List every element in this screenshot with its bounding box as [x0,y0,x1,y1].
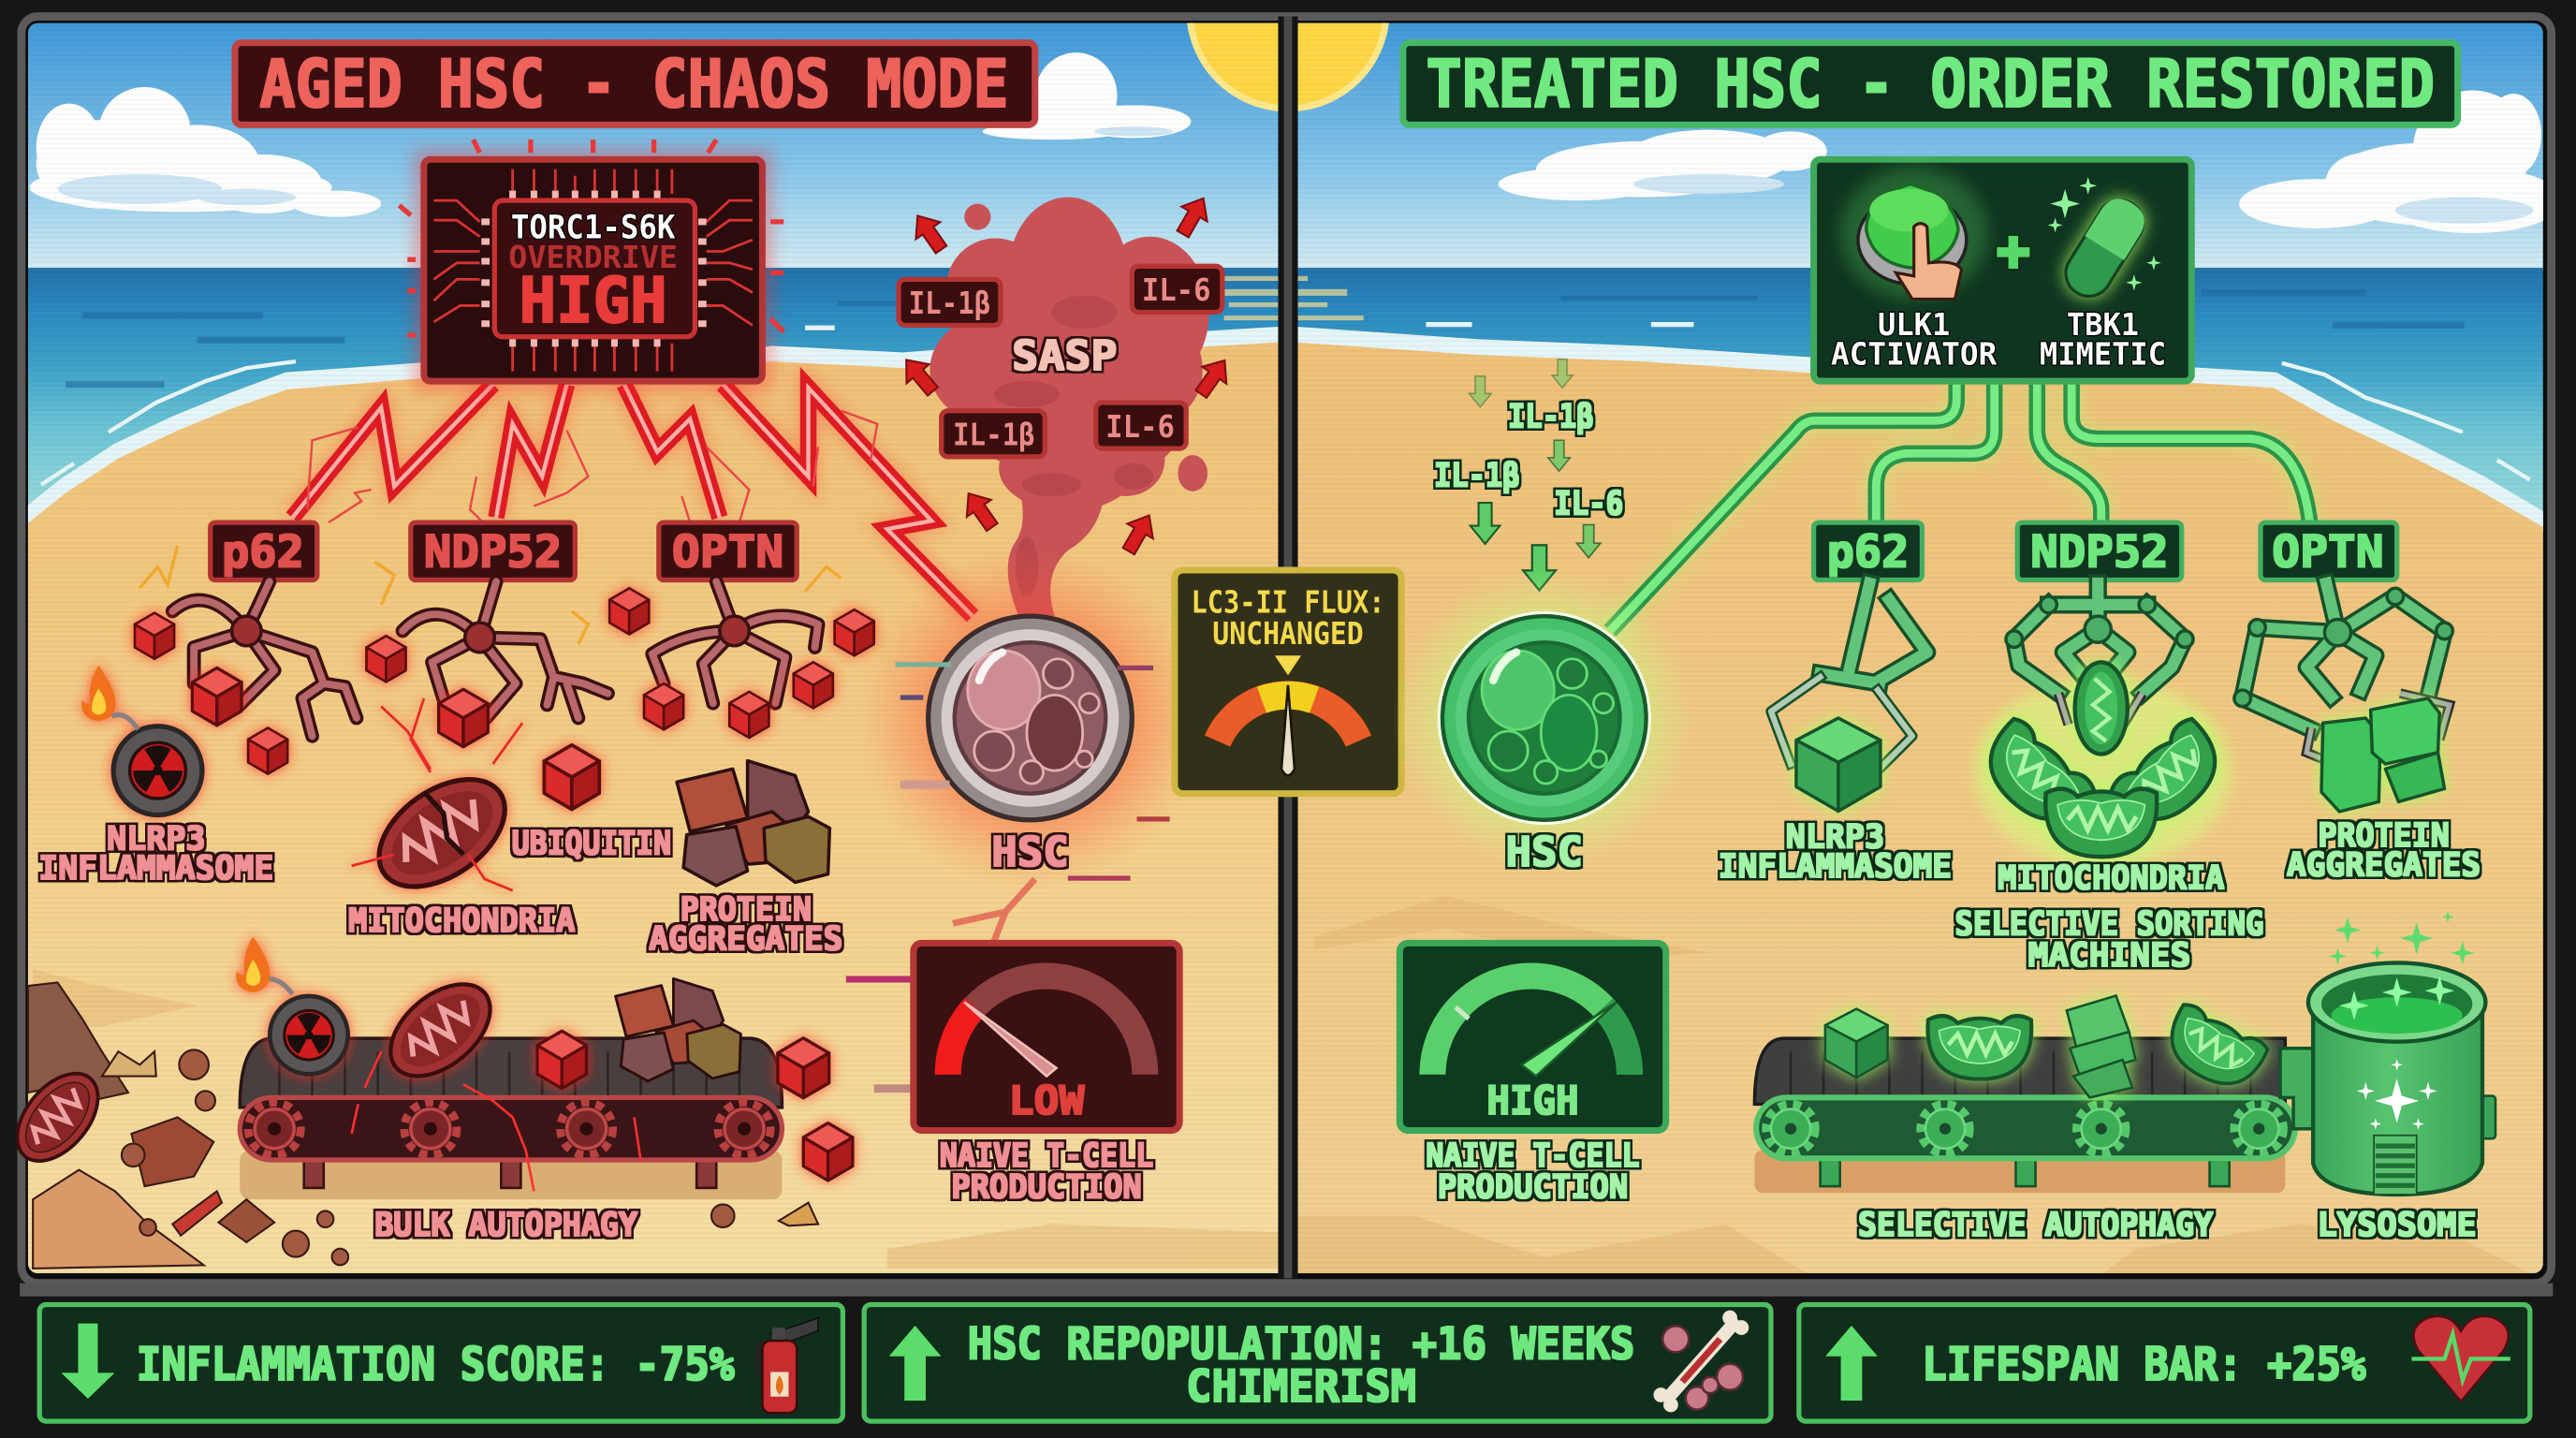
crack to gauge [953,879,1035,942]
selective claws [1771,583,2452,774]
labels: aged: MITOCHONDRIA [348,902,575,940]
adaptor labels: aged [211,522,797,580]
TORC1 chip: OVERDRIVE [508,239,678,275]
therapy labels: ULK1 [1878,306,1950,343]
items on conveyor: aged [236,936,853,1181]
adaptor labels: aged: p62 [222,526,304,578]
icon: capsule [2048,177,2161,305]
LC3-II flux panel: UNCHANGED [1212,615,1364,652]
icon: fire extinguisher [757,1318,818,1413]
labels: treated [1719,816,2481,975]
red arrows around cloud [895,191,1237,559]
outcome panel: lifespan [1799,1304,2530,1421]
TORC1 chip [400,139,783,391]
ubiquitin cubes [135,588,874,810]
outcome panel: inflammation [39,1304,842,1421]
aged HSC cell [846,546,1203,1093]
adaptor labels: treated: NDP52 [2030,526,2169,578]
labels: selective autophagy and lysosome [1858,1206,2477,1244]
cytokine tags: IL-1β [953,417,1035,453]
treated HSC cell [1393,566,1695,869]
bulk autophagy conveyor [240,1038,782,1199]
labels: aged: INFLAMMASOME [38,849,273,888]
labels: selective autophagy and lysosome: LYSOSOME [2318,1206,2477,1244]
gauge: naive T-cell low: LOW [1009,1078,1085,1123]
icon: up arrow [887,1325,943,1401]
gauge label: treated [1426,1137,1640,1206]
protein aggregates on conveyor [616,978,740,1081]
gauge label: treated: NAIVE T-CELL [1426,1137,1640,1175]
labels: aged: NLRP3 [107,819,205,858]
protein aggregates [677,761,829,886]
glitch streaks [846,662,1170,1093]
therapy panel: ACTIVATOR [1831,336,1998,373]
outcome panel: inflammation: INFLAMMATION SCORE: -75% [137,1337,735,1391]
SASP smoke cloud [895,191,1237,616]
cytokine tags: IL-1β [909,285,990,321]
icon: down arrow [59,1323,117,1400]
LC3-II flux panel: LC3-II FLUX: [1191,584,1385,621]
falling cytokines: treated: IL-6 [1554,484,1623,522]
items on conveyor: treated [1825,996,2270,1098]
outcome panel: lifespan: LIFESPAN BAR: +25% [1922,1337,2366,1391]
therapy panel [1814,159,2191,381]
labels: treated: MACHINES [2028,936,2190,975]
clouds [30,52,2563,233]
broken claws [139,546,842,736]
adaptor labels: aged: OPTN [672,526,783,578]
labels: treated: AGGREGATES [2287,845,2481,884]
HSC label: aged: HSC [991,829,1069,876]
outcome panel: repopulation [864,1304,1771,1421]
labels: treated: MITOCHONDRIA [1998,858,2224,897]
labels: treated: PROTEIN [2318,816,2450,855]
lysosome [2280,911,2496,1195]
icon: green button with hand [1840,168,1988,299]
falling cytokines: treated: IL-1β [1508,397,1593,435]
icon: up arrow [1823,1325,1880,1401]
cytokine tags [899,266,1222,457]
cytokine tags: IL-6 [1142,271,1211,308]
gauge label: treated: PRODUCTION [1438,1167,1628,1206]
cargo: green protein aggregates [2321,698,2445,812]
labels: aged: AGGREGATES [649,919,842,958]
adaptor labels: treated: p62 [1827,526,1909,578]
SASP label: SASP [1012,332,1117,380]
lightning bolts from chip [292,385,973,616]
glow behind sorting cargo [1975,677,2231,868]
green pipes [1610,385,2310,631]
gauge label: aged: NAIVE T-CELL [940,1137,1153,1175]
labels: selective autophagy and lysosome: SELECTIVE AUTOPHAGY [1858,1206,2213,1244]
gauge label: aged: PRODUCTION [951,1167,1142,1206]
title: aged HSC: AGED HSC - CHAOS MODE [259,46,1009,123]
title: treated HSC: TREATED HSC - ORDER RESTORED [1426,46,2435,123]
outcome panel: repopulation: CHIMERISM [1186,1361,1416,1413]
vertical divider [1278,17,1298,1278]
rubble pile [1,983,818,1269]
gauge: naive T-cell high: HIGH [1486,1078,1579,1123]
selective autophagy conveyor [1754,1038,2295,1193]
label: bulk autophagy: BULK AUTOPHAGY [374,1206,637,1244]
labels: treated: NLRP3 [1786,818,1884,857]
gauge: naive T-cell low [914,943,1179,1130]
HSC label: treated: HSC [1506,829,1583,876]
outcome panel: repopulation: HSC REPOPULATION: +16 WEEKS [968,1318,1634,1370]
adaptor labels: aged: NDP52 [424,526,562,578]
cargo: green mitochondria [1972,662,2233,857]
LC3-II flux panel [1175,570,1401,794]
TORC1 chip: HIGH [520,264,667,337]
labels: aged: UBIQUITIN [512,825,671,863]
icon: heart with pulse [2411,1316,2510,1401]
chip text: TORC1-S6K [511,208,675,246]
falling cytokines: treated: IL-1β [1434,456,1519,494]
falling cytokines: treated [1434,360,1623,591]
sun glint on water [1224,275,1364,320]
cargo: NLRP3 cube [1796,718,1881,811]
adaptor labels: treated [1814,522,2397,580]
therapy panel: MIMETIC [2040,336,2166,373]
labels: treated: INFLAMMASOME [1719,847,1952,886]
cytokine tags: IL-6 [1105,408,1175,445]
gauge label: aged [940,1137,1153,1206]
damaged mitochondrion [352,698,524,908]
labels: aged [38,819,842,958]
adaptor labels: treated: OPTN [2272,526,2384,578]
therapy panel: TBK1 [2067,306,2139,343]
plus sign [1996,235,2030,270]
sun [1187,22,1389,111]
labels: treated: SELECTIVE SORTING [1955,905,2263,944]
gauge: naive T-cell high [1399,943,1666,1130]
labels: aged: PROTEIN [681,890,812,929]
NLRP3 bomb: aged [81,666,202,814]
icon: bone and cells [1653,1311,1749,1412]
